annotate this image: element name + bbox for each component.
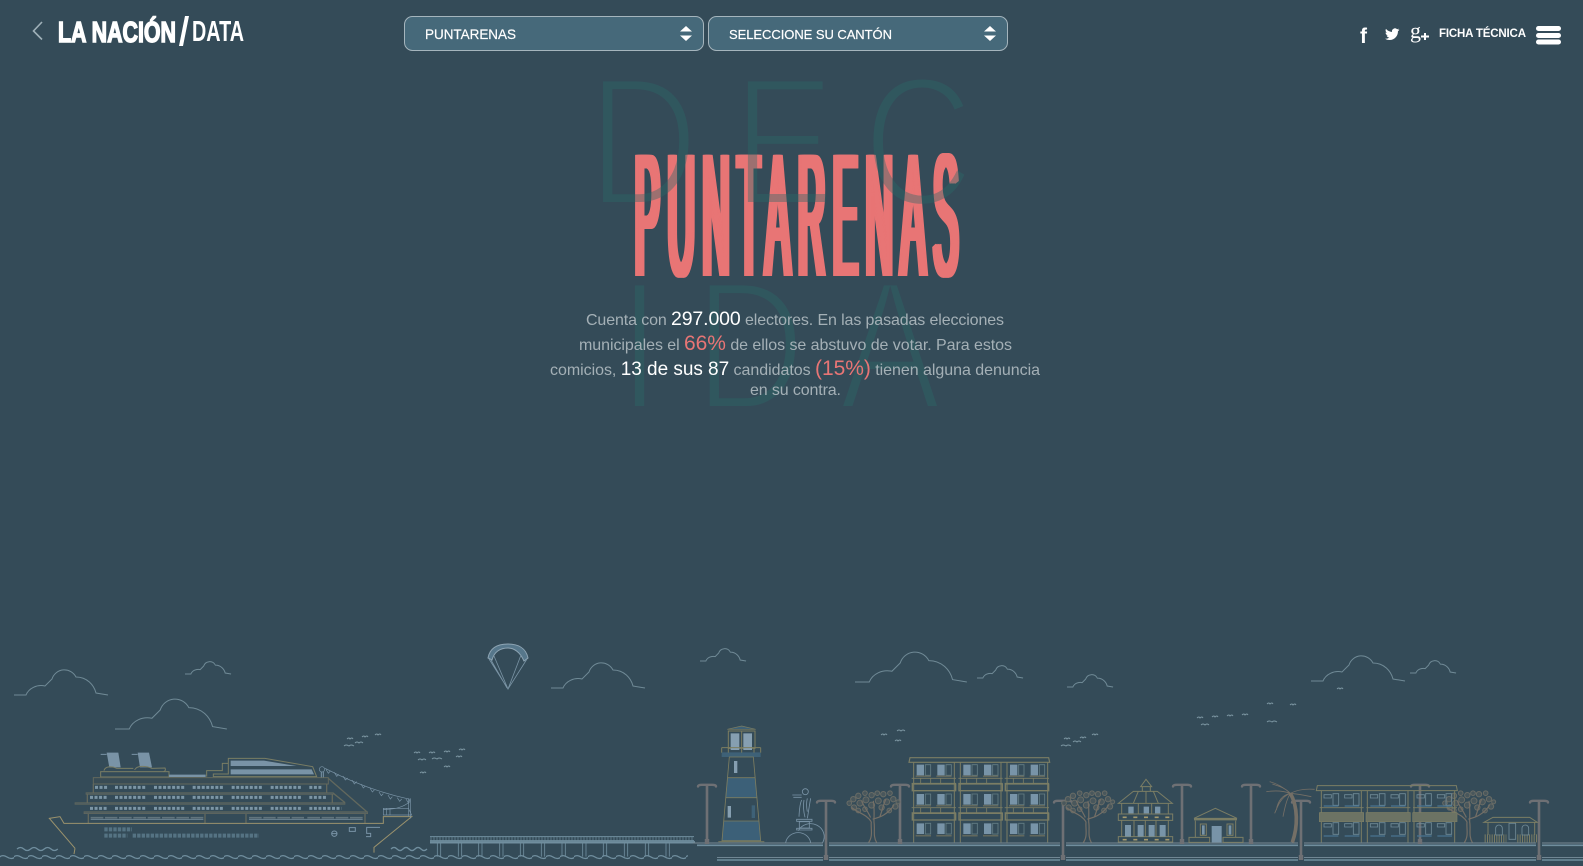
- intro paragraph: [550, 308, 1040, 399]
- pier: [430, 837, 695, 857]
- select: province: PUNTARENAS: [425, 27, 516, 42]
- birds: [344, 688, 1343, 773]
- background word: DECIDA: DEC: [588, 39, 973, 244]
- statue: [786, 789, 824, 843]
- social icons: g: [1410, 18, 1421, 43]
- water waves: [0, 848, 688, 861]
- street lamps: [698, 785, 1548, 860]
- intro paragraph: comicios, 13 de sus 87 candidatos (15%) tienen alguna denuncia: [550, 357, 1040, 380]
- logo: DATA: [192, 16, 244, 48]
- intro paragraph: municipales el 66% de ellos se abstuvo de votar. Para estos: [579, 332, 1012, 355]
- small house: [1189, 808, 1243, 842]
- trees: [847, 791, 1496, 842]
- palm tree: [1266, 782, 1315, 842]
- social icons: f: [1360, 25, 1368, 48]
- colonial house: [1118, 779, 1173, 842]
- intro paragraph: Cuenta con 297.000 electores. En las pasadas elecciones: [586, 308, 1004, 330]
- upper decks: [95, 758, 325, 781]
- roads: [693, 843, 1583, 860]
- background word: DECIDA: [603, 80, 964, 406]
- intro paragraph: en su contra.: [750, 382, 841, 399]
- background word: DECIDA: IDA: [618, 243, 941, 448]
- hull and decks: [49, 778, 412, 854]
- icon: back chevron: [34, 22, 42, 40]
- select: province: [404, 16, 704, 50]
- icon: menu: [1536, 26, 1561, 44]
- apartment building: [909, 758, 1050, 842]
- long building: [1316, 786, 1457, 842]
- icon: paraglider: [488, 644, 528, 689]
- ficha tecnica link: FICHA TÉCNICA: [1439, 27, 1526, 40]
- select: canton: [708, 16, 1008, 50]
- bow mast and bunting: [319, 767, 412, 818]
- social icons: [1360, 18, 1429, 48]
- cottage: [1484, 817, 1537, 839]
- select: canton: SELECCIONE SU CANTÓN: [729, 27, 892, 42]
- title: PUNTARENAS: [635, 118, 966, 314]
- foreground text and header: [32, 16, 1561, 406]
- funnels: [101, 753, 165, 772]
- logo: LA NACIÓN: [58, 15, 176, 49]
- cruise ship: [49, 753, 412, 854]
- lighthouse: [718, 726, 764, 842]
- clouds: [14, 649, 1456, 729]
